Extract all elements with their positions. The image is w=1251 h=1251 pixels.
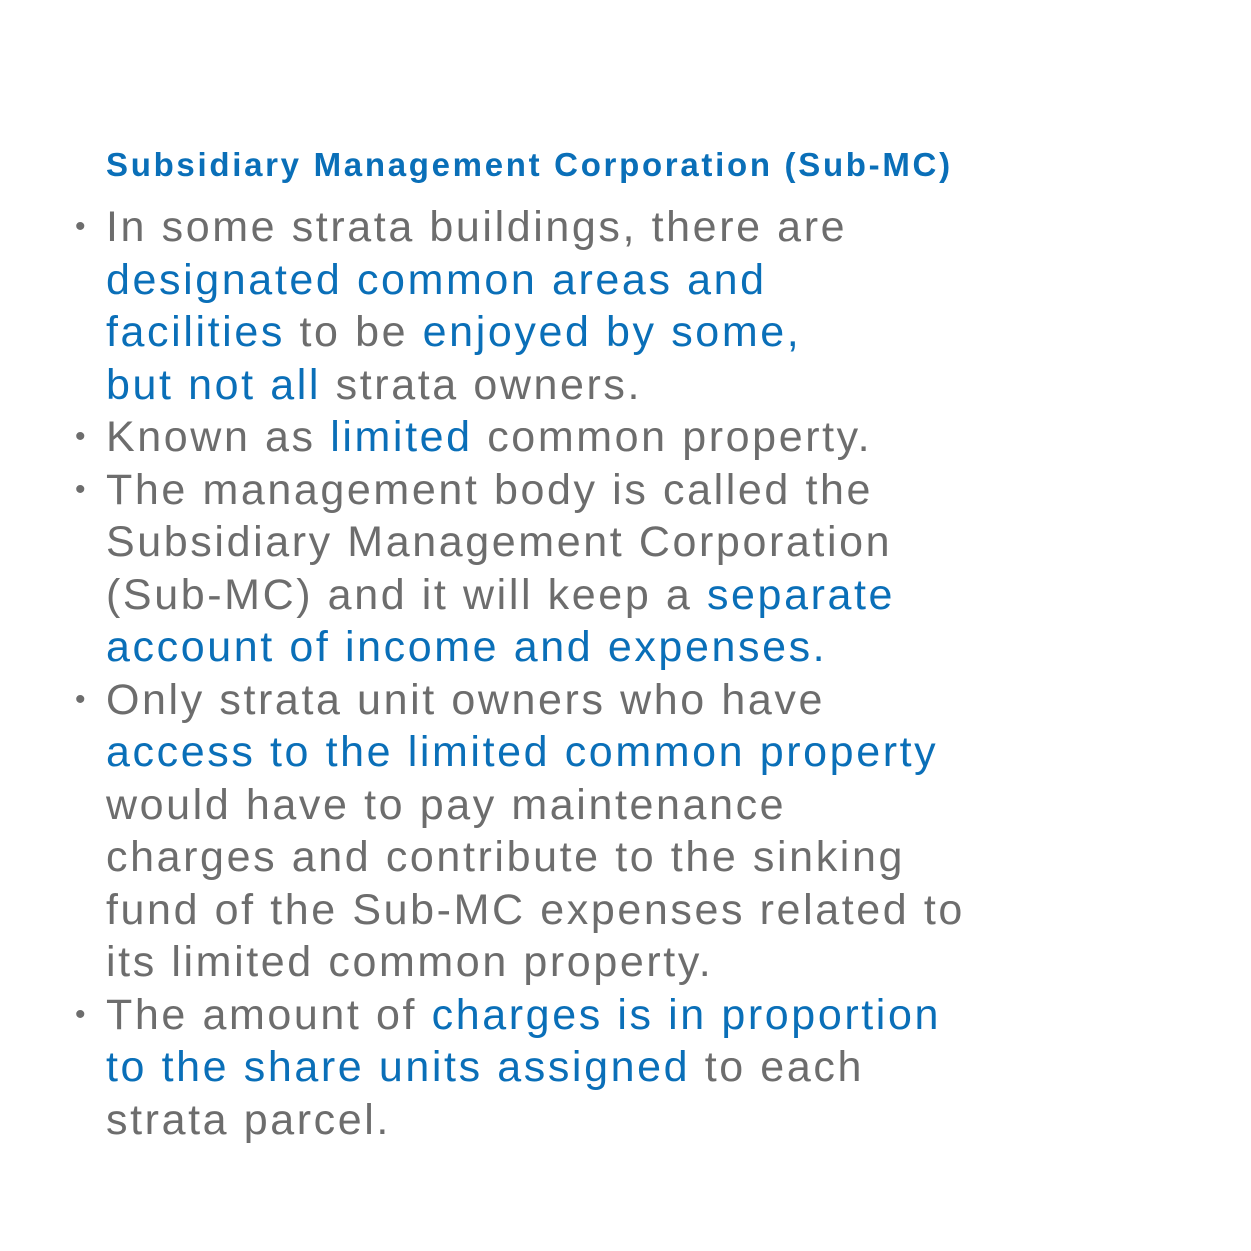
bullet 5: to the share units assigned to each — [106, 1043, 864, 1091]
title: Subsidiary Management Corporation (Sub-MC) — [106, 146, 953, 183]
bullet 4: would have to pay maintenance — [106, 780, 786, 828]
bullet 3: account of income and expenses. — [106, 623, 827, 671]
bullet 4: its limited common property. — [106, 938, 713, 986]
text: • — [75, 998, 88, 1030]
bullet 3 — [75, 466, 895, 671]
bullet 5 — [75, 990, 941, 1144]
bullet 4: Only strata unit owners who have — [106, 676, 825, 724]
bullet 1: but not all strata owners. — [106, 360, 642, 408]
bullet list — [75, 203, 965, 1144]
bullet 3: The management body is called the — [106, 466, 873, 514]
text: • — [75, 682, 88, 716]
bullet 3: Subsidiary Management Corporation — [106, 518, 892, 566]
bullet 4: charges and contribute to the sinking — [106, 833, 905, 881]
text: • — [75, 472, 88, 506]
bullet 5: The amount of charges is in proportion — [106, 990, 941, 1038]
bullet 2: Known as limited common property. — [106, 413, 872, 461]
bullet 1: facilities to be enjoyed by some, — [106, 308, 801, 356]
text: • — [75, 420, 88, 453]
bullet 1: In some strata buildings, there are — [106, 203, 847, 251]
bullet 3: (Sub-MC) and it will keep a separate — [106, 570, 895, 618]
text: • — [75, 210, 88, 243]
bullet 4: access to the limited common property — [106, 728, 938, 776]
bullet 4 — [75, 676, 965, 986]
bullet 1: designated common areas and — [106, 256, 767, 304]
bullet 5: strata parcel. — [106, 1096, 391, 1144]
bullet 1 — [75, 203, 847, 408]
bullet 4: fund of the Sub-MC expenses related to — [106, 886, 965, 934]
